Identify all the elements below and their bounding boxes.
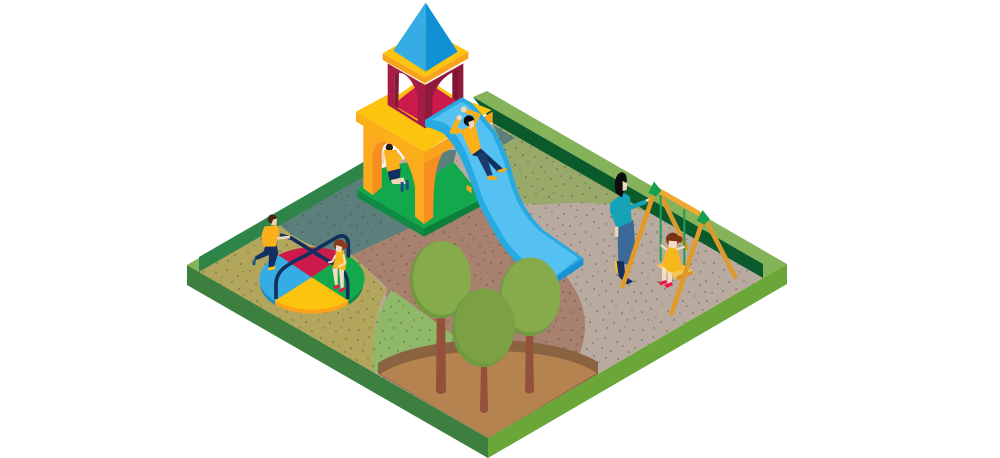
merry-go-round <box>252 214 365 314</box>
play tower <box>356 3 493 237</box>
roof <box>393 3 458 72</box>
front legs <box>623 189 702 313</box>
boy <box>252 214 290 271</box>
back-right wall <box>473 97 763 278</box>
top caps <box>648 182 710 225</box>
back-left wall <box>199 157 372 272</box>
back legs <box>662 197 735 277</box>
tree left <box>410 241 471 394</box>
cupola <box>388 63 463 128</box>
tree front <box>452 288 515 413</box>
woman <box>610 172 654 284</box>
trees <box>410 241 560 413</box>
platform base <box>187 91 787 458</box>
deck <box>356 80 493 163</box>
ropes <box>661 195 684 265</box>
eave and roof <box>383 3 468 83</box>
tower base <box>357 150 483 237</box>
tree right <box>499 258 560 394</box>
ground zones <box>199 123 763 438</box>
child on slide <box>452 106 507 180</box>
girl <box>328 239 348 293</box>
lower arcade <box>363 120 448 224</box>
girl on swing <box>658 233 685 288</box>
handles <box>276 235 348 299</box>
child in arch <box>382 144 409 192</box>
sand pit <box>378 340 598 438</box>
swing set <box>610 172 735 313</box>
platform <box>259 247 365 314</box>
seat <box>656 262 693 281</box>
slide <box>425 97 583 282</box>
cupola eave <box>383 28 468 83</box>
tower lower structure <box>357 120 483 237</box>
